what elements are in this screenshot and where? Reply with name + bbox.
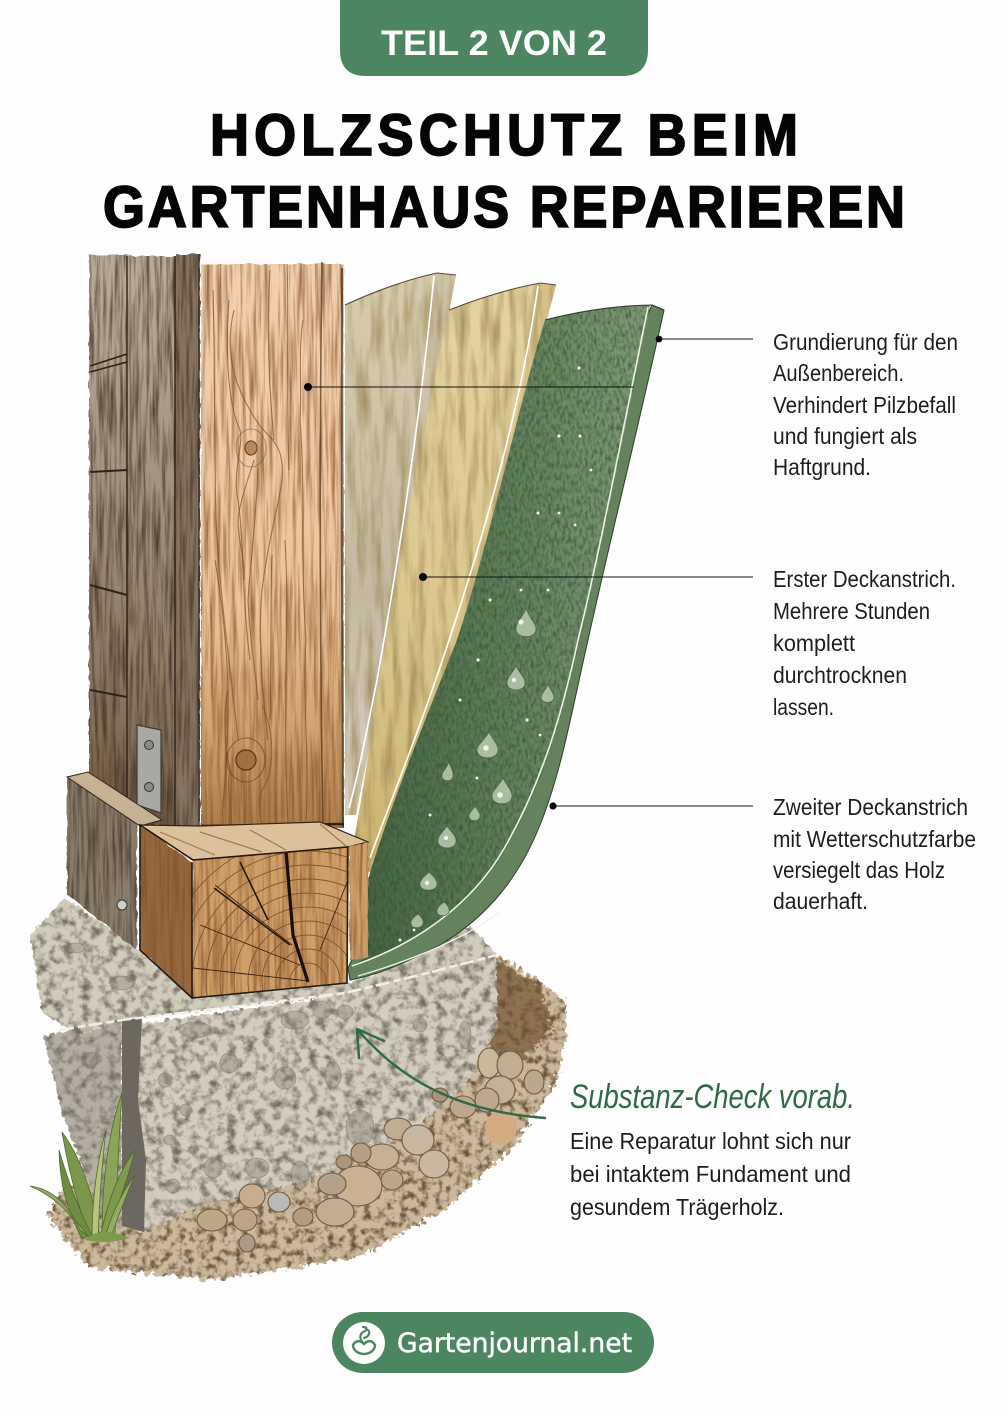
substance check text xyxy=(570,1128,851,1220)
block top grain xyxy=(160,824,346,855)
substance check heading: Substanz-Check vorab. xyxy=(570,1078,855,1116)
icon: sprout logo xyxy=(343,1322,385,1364)
weathered board right xyxy=(175,254,200,828)
callout 1 text xyxy=(773,329,958,480)
block outlines xyxy=(140,825,348,998)
header tab: part indicator: TEIL 2 VON 2 xyxy=(381,24,607,63)
concrete corner shadow xyxy=(122,1018,146,1232)
chipped concrete edge xyxy=(60,955,497,1030)
callout 1 text: Grundierung für den xyxy=(773,329,958,355)
callout 1 text: Außenbereich. xyxy=(773,360,904,386)
block right extension xyxy=(349,842,368,960)
title: HOLZSCHUTZ BEIM xyxy=(210,102,798,167)
weathered board middle xyxy=(127,256,176,826)
concrete left face xyxy=(43,1020,122,1230)
grass tuft xyxy=(30,1093,135,1242)
callout 2 text: lassen. xyxy=(773,694,834,720)
dark soil behind the foundation xyxy=(490,960,552,1070)
substance check text: gesundem Trägerholz. xyxy=(570,1194,784,1220)
arrow: foundation check xyxy=(357,1029,545,1118)
layer 1 back flap xyxy=(345,273,456,815)
rear block top xyxy=(67,772,162,826)
footer brand pill: Gartenjournal.net xyxy=(397,1328,632,1359)
header tab: part indicator xyxy=(340,0,648,76)
callout 2 text xyxy=(773,566,956,720)
callout 3 text xyxy=(773,794,976,914)
metal bracket with screws xyxy=(137,725,161,813)
rear block side xyxy=(67,777,137,950)
title xyxy=(103,102,905,239)
callout 1 text: Verhindert Pilzbefall xyxy=(773,392,956,418)
water drops xyxy=(411,608,554,928)
weathered board left xyxy=(89,255,129,805)
callout 3 leader line xyxy=(549,802,753,810)
wood grain lines xyxy=(213,262,343,828)
callout 1 leader lines xyxy=(304,336,753,391)
callout 2 text: Erster Deckanstrich. xyxy=(773,566,956,592)
callout 2 leader line xyxy=(419,573,753,581)
illustration: timber sill block xyxy=(66,772,370,999)
illustration: coating layer 3 second topcoat green xyxy=(348,305,664,980)
white droplet specks xyxy=(398,366,592,941)
layer 1 sheet xyxy=(345,273,437,815)
front face xyxy=(201,264,344,828)
block side face xyxy=(140,825,192,998)
block end grain xyxy=(192,847,348,998)
illustration: weathered side boards xyxy=(89,254,200,828)
wood knot lower xyxy=(227,738,265,782)
callout 2 text: durchtrocknen xyxy=(773,662,907,688)
substance check text: bei intaktem Fundament und xyxy=(570,1161,851,1187)
layer 2 highlight xyxy=(370,286,538,858)
illustration: foundation, ground and stones xyxy=(30,898,566,1280)
layer 2 back flap xyxy=(360,283,556,875)
rocks at the foundation base xyxy=(197,1048,544,1252)
footer brand pill xyxy=(332,1312,654,1373)
layer 3 back edge xyxy=(348,305,664,980)
shadow under post xyxy=(201,824,344,826)
layer 3 front sheet xyxy=(350,305,650,967)
block top face xyxy=(140,822,368,860)
callout 2 text: Mehrere Stunden xyxy=(773,598,930,624)
callout 1 text: und fungiert als xyxy=(773,423,917,449)
board seams xyxy=(90,254,199,828)
illustration: coating layer 2 first topcoat xyxy=(352,283,556,875)
callout 1 text: Haftgrund. xyxy=(773,454,871,480)
illustration: fresh wood post front xyxy=(201,262,344,828)
callout 3 text: dauerhaft. xyxy=(773,888,868,914)
pitted holes in concrete xyxy=(65,943,471,1193)
layer 2 sheet xyxy=(352,283,541,862)
growth rings and cracks xyxy=(192,850,348,998)
callout 3 text: mit Wetterschutzfarbe xyxy=(773,826,976,852)
layer 3 highlights xyxy=(352,307,648,966)
callout 2 text: komplett xyxy=(773,630,856,656)
ground soil xyxy=(48,955,566,1280)
callout 3 text: Zweiter Deckanstrich xyxy=(773,794,968,820)
illustration: coating layer 1 primer xyxy=(345,273,456,815)
substance check text: Eine Reparatur lohnt sich nur xyxy=(570,1128,851,1154)
wood knot upper xyxy=(236,429,266,467)
concrete top surface xyxy=(30,898,497,1036)
title: GARTENHAUS REPARIEREN xyxy=(103,174,905,239)
layer 1 highlight xyxy=(349,276,434,808)
concrete front face xyxy=(136,955,497,1232)
callout 3 text: versiegelt das Holz xyxy=(773,857,945,883)
screw head xyxy=(117,900,127,910)
